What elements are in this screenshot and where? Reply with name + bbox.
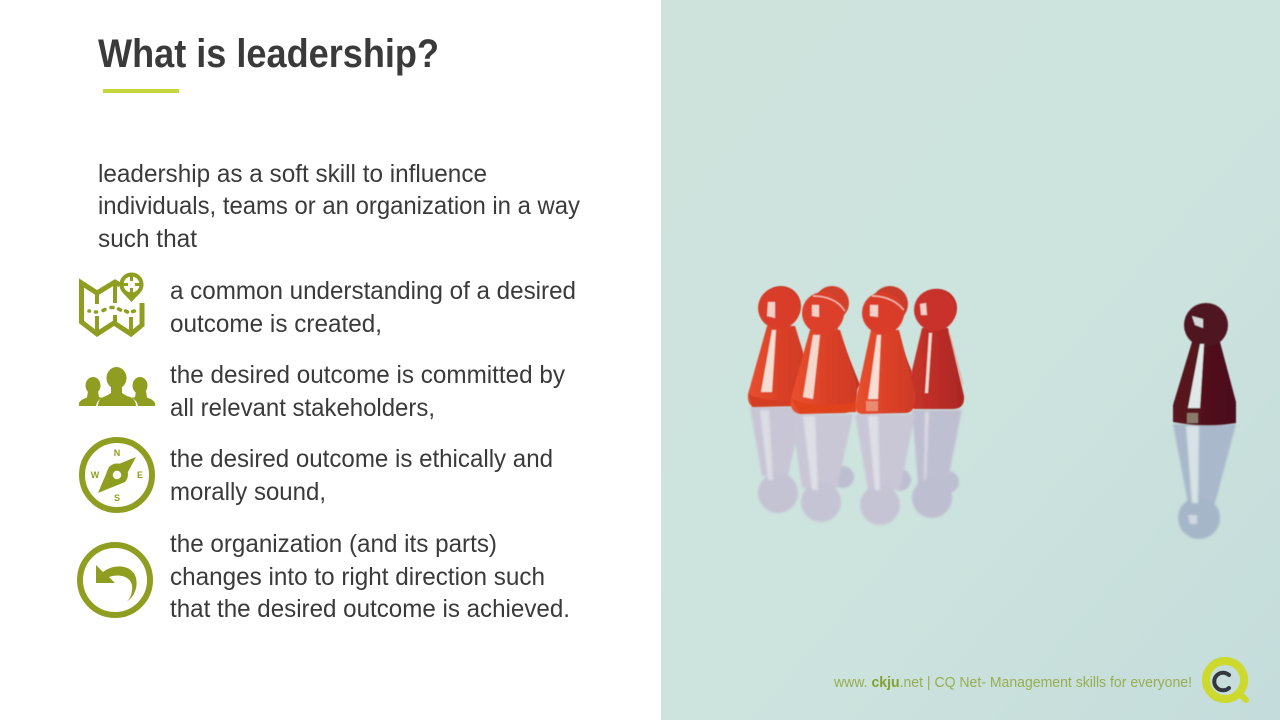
- title: What is leadership?: [98, 32, 439, 76]
- item 1 text: outcome is created,: [170, 310, 382, 338]
- icon: compass: N: [114, 448, 120, 458]
- red pawn second: [791, 292, 857, 414]
- icon: map with pin: [82, 272, 144, 334]
- dark pawn: [1173, 303, 1236, 425]
- icon: people: [79, 367, 155, 406]
- item 4 text: changes into to right direction such: [170, 563, 545, 591]
- panel: photo of pawns: [661, 0, 1280, 720]
- item 4 text: that the desired outcome is achieved.: [170, 595, 570, 623]
- logo: [1206, 661, 1246, 700]
- intro text: [98, 160, 580, 253]
- icon: compass: S: [114, 493, 120, 503]
- footer text: www. ckju.net | CQ Net- Management skills for everyone!: [833, 674, 1192, 691]
- back row pawns: [761, 286, 957, 405]
- item 1 text: a common understanding of a desired: [170, 277, 576, 305]
- pawn reflections: [750, 407, 1236, 539]
- item 4 text: the organization (and its parts): [170, 530, 497, 558]
- item 2 text: [170, 361, 565, 422]
- icon: compass: W: [91, 470, 100, 480]
- intro text: leadership as a soft skill to influence: [98, 160, 487, 188]
- intro text: individuals, teams or an organization in a way: [98, 192, 580, 220]
- item 3 text: the desired outcome is ethically and: [170, 445, 553, 473]
- intro text: such that: [98, 225, 197, 253]
- item 3 text: [170, 445, 553, 506]
- item 4 text: [170, 530, 570, 623]
- icon: return arrow: [80, 545, 150, 615]
- icon: compass: [82, 440, 152, 510]
- item 2 text: all relevant stakeholders,: [170, 394, 435, 422]
- red pawn left: [748, 287, 805, 407]
- panel: white text side: [0, 0, 661, 720]
- item 2 text: the desired outcome is committed by: [170, 361, 565, 389]
- title underline: [103, 89, 179, 93]
- icon: compass: E: [137, 470, 143, 480]
- item 1 text: [170, 277, 576, 338]
- red pawn third: [855, 292, 915, 414]
- item 3 text: morally sound,: [170, 478, 326, 506]
- red pawn far right: [906, 289, 964, 409]
